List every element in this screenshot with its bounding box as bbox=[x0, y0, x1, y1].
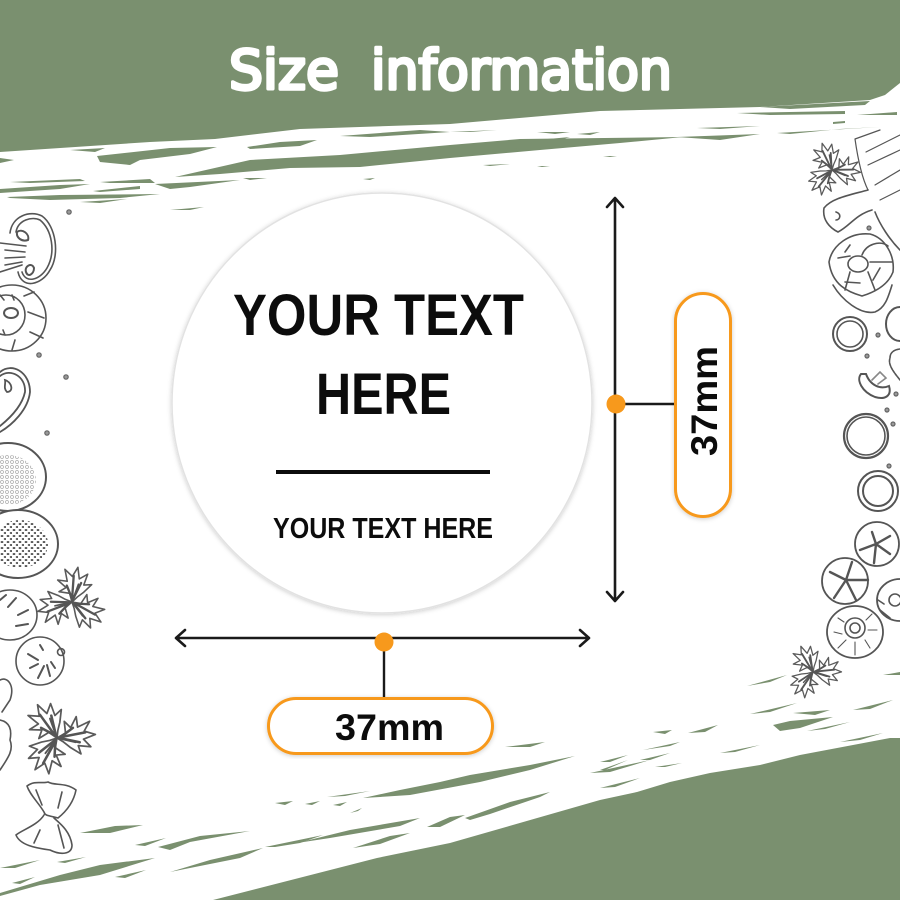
doodle: small ring bbox=[833, 317, 867, 351]
doodle: round slice bbox=[0, 590, 37, 640]
horizontal dimension arrow bbox=[176, 630, 589, 646]
horizontal size pill: 37mm bbox=[335, 707, 444, 748]
doodle: star slice right bbox=[855, 522, 899, 566]
doodle: small parsley top bbox=[798, 137, 869, 202]
doodle: bean bbox=[0, 368, 30, 432]
top green brush band bbox=[0, 0, 900, 152]
doodle: small mushroom bbox=[859, 372, 890, 398]
orange marker bottom bbox=[374, 632, 394, 652]
doodle: cropped ring bbox=[886, 307, 900, 341]
top brush streaks bbox=[0, 101, 897, 210]
doodle: parsley bbox=[26, 557, 122, 647]
bottom brush streaks bbox=[0, 672, 900, 896]
doodle: large ring bbox=[844, 414, 888, 458]
title: Size bbox=[229, 39, 339, 102]
horizontal size pill bbox=[268, 698, 492, 754]
divider line bbox=[276, 470, 490, 474]
doodle: cropped slice bbox=[877, 579, 900, 621]
vertical dimension arrow bbox=[607, 198, 623, 601]
doodle: fine dotted round bbox=[0, 443, 46, 511]
headline text line 1: YOUR TEXT bbox=[233, 283, 524, 348]
doodle: star slice left bbox=[822, 558, 868, 604]
vertical size pill: 37mm bbox=[684, 346, 725, 456]
doodle: mushroom bbox=[0, 214, 56, 284]
decorative dots bbox=[37, 210, 898, 468]
doodle: small parsley bottom bbox=[777, 636, 852, 706]
doodle: cropped shapes bbox=[0, 679, 12, 770]
circle shape bbox=[172, 193, 592, 613]
title: information bbox=[371, 39, 672, 102]
left food doodles bbox=[0, 214, 122, 853]
doodle: medium ring bbox=[858, 471, 898, 511]
doodle: large parsley bbox=[6, 687, 111, 786]
vertical connector bbox=[616, 403, 675, 405]
doodle: farfalle bbox=[16, 782, 76, 853]
right food doodles bbox=[777, 130, 900, 706]
orange marker right bbox=[606, 394, 626, 414]
title bbox=[229, 39, 672, 102]
doodle: cropped splat bbox=[889, 349, 900, 380]
vertical size pill bbox=[676, 294, 730, 516]
headline text line 2: HERE bbox=[316, 362, 451, 427]
doodle: dark dotted round bbox=[0, 510, 58, 578]
doodle: shell bbox=[0, 285, 46, 351]
subtext: YOUR TEXT HERE bbox=[273, 513, 493, 545]
doodle: dumpling bbox=[16, 637, 64, 685]
horizontal connector bbox=[383, 642, 385, 698]
doodle: spoon bbox=[824, 190, 900, 250]
doodle: cutting board bbox=[855, 130, 900, 200]
doodle: shell slice bbox=[827, 606, 883, 658]
doodle: pepper bbox=[829, 234, 893, 312]
label circle bbox=[172, 193, 592, 613]
bottom green brush band bbox=[213, 738, 900, 900]
